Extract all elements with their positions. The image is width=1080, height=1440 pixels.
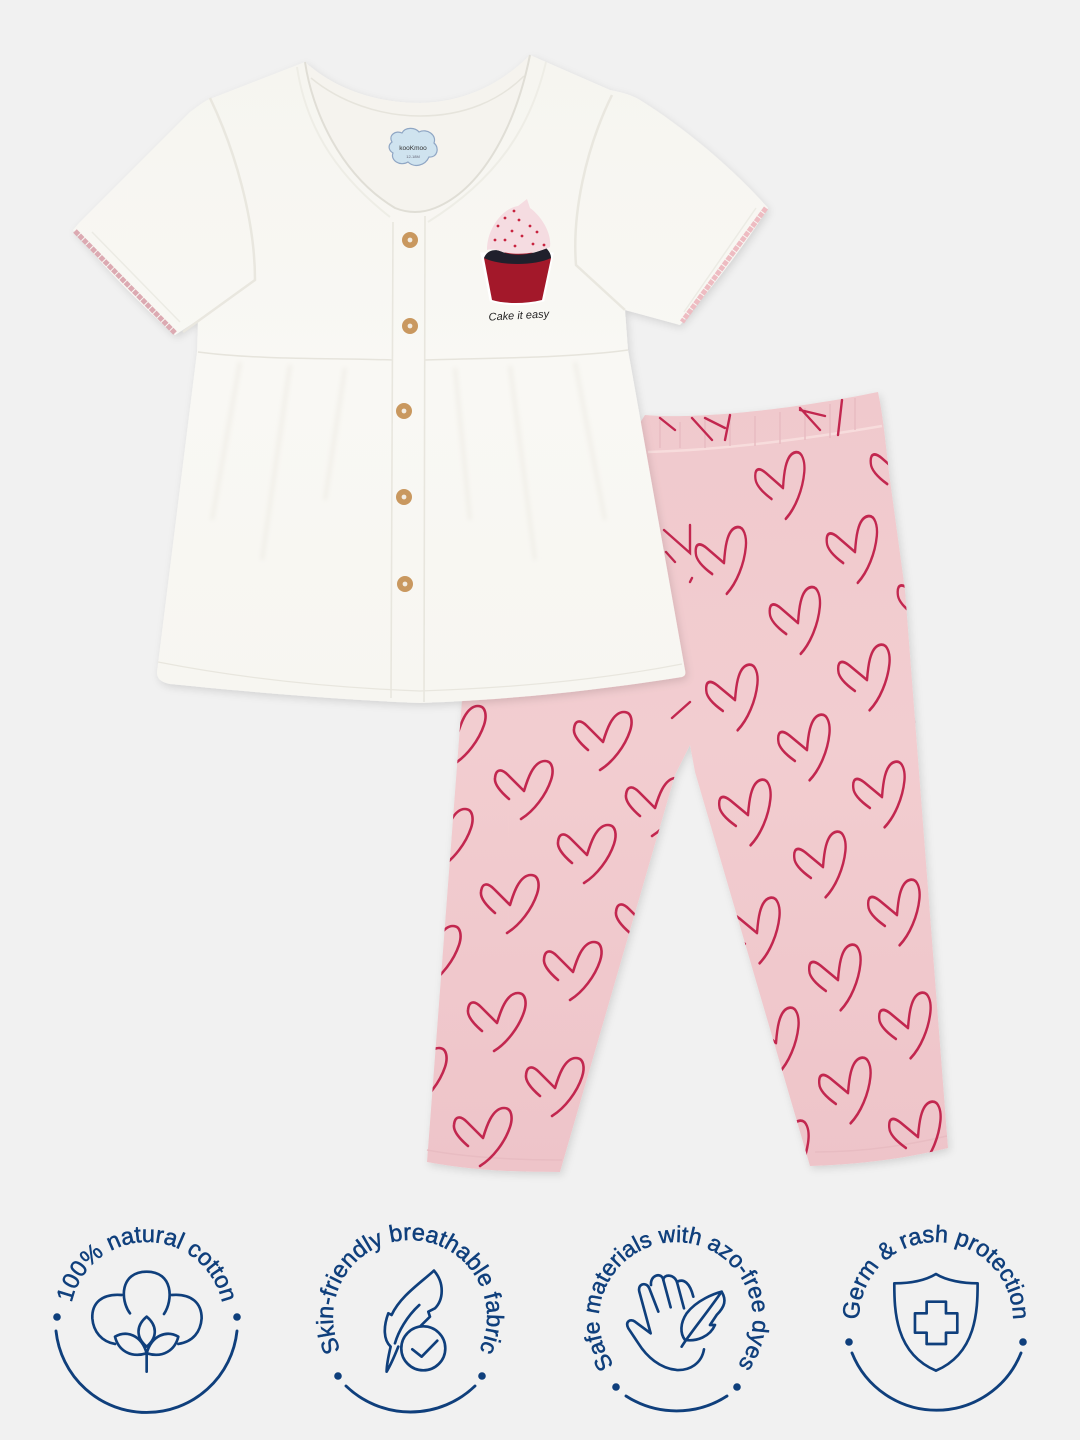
badge: skin-friendly breathable fabric xyxy=(316,1224,504,1414)
neck label: 12-18M xyxy=(406,154,420,159)
garment body xyxy=(73,55,768,703)
icon: cotton boll xyxy=(92,1272,202,1372)
neck label: kooKmoo xyxy=(399,145,427,152)
buttons xyxy=(396,232,418,592)
inside back neck xyxy=(305,55,530,212)
pink sleeve trim xyxy=(75,231,175,333)
top xyxy=(73,55,768,703)
badge: germ and rash protection: Germ & rash protection xyxy=(842,1224,1026,1318)
waist gathers xyxy=(198,350,628,560)
button placket xyxy=(158,216,682,702)
leggings xyxy=(426,392,952,1177)
neck label xyxy=(389,128,437,165)
icon: hand with feather xyxy=(627,1275,724,1370)
badge: 100% natural cotton xyxy=(53,1227,241,1414)
cupcake print xyxy=(482,199,552,324)
badge: 100% natural cotton: 100% natural cotton xyxy=(57,1227,234,1302)
icon: feather with check xyxy=(385,1271,445,1372)
sleeve seams and shading xyxy=(183,98,255,332)
badge: germ and rash protection xyxy=(842,1224,1027,1412)
icon: shield with cross xyxy=(894,1274,978,1371)
badge: safe materials with azo-free dyes: Safe materials with azo-free dyes xyxy=(584,1225,770,1371)
badge: skin-friendly breathable fabric: Skin-friendly breathable fabric xyxy=(316,1224,504,1354)
cupcake print: Cake it easy xyxy=(488,308,551,324)
heart print xyxy=(389,400,976,1190)
